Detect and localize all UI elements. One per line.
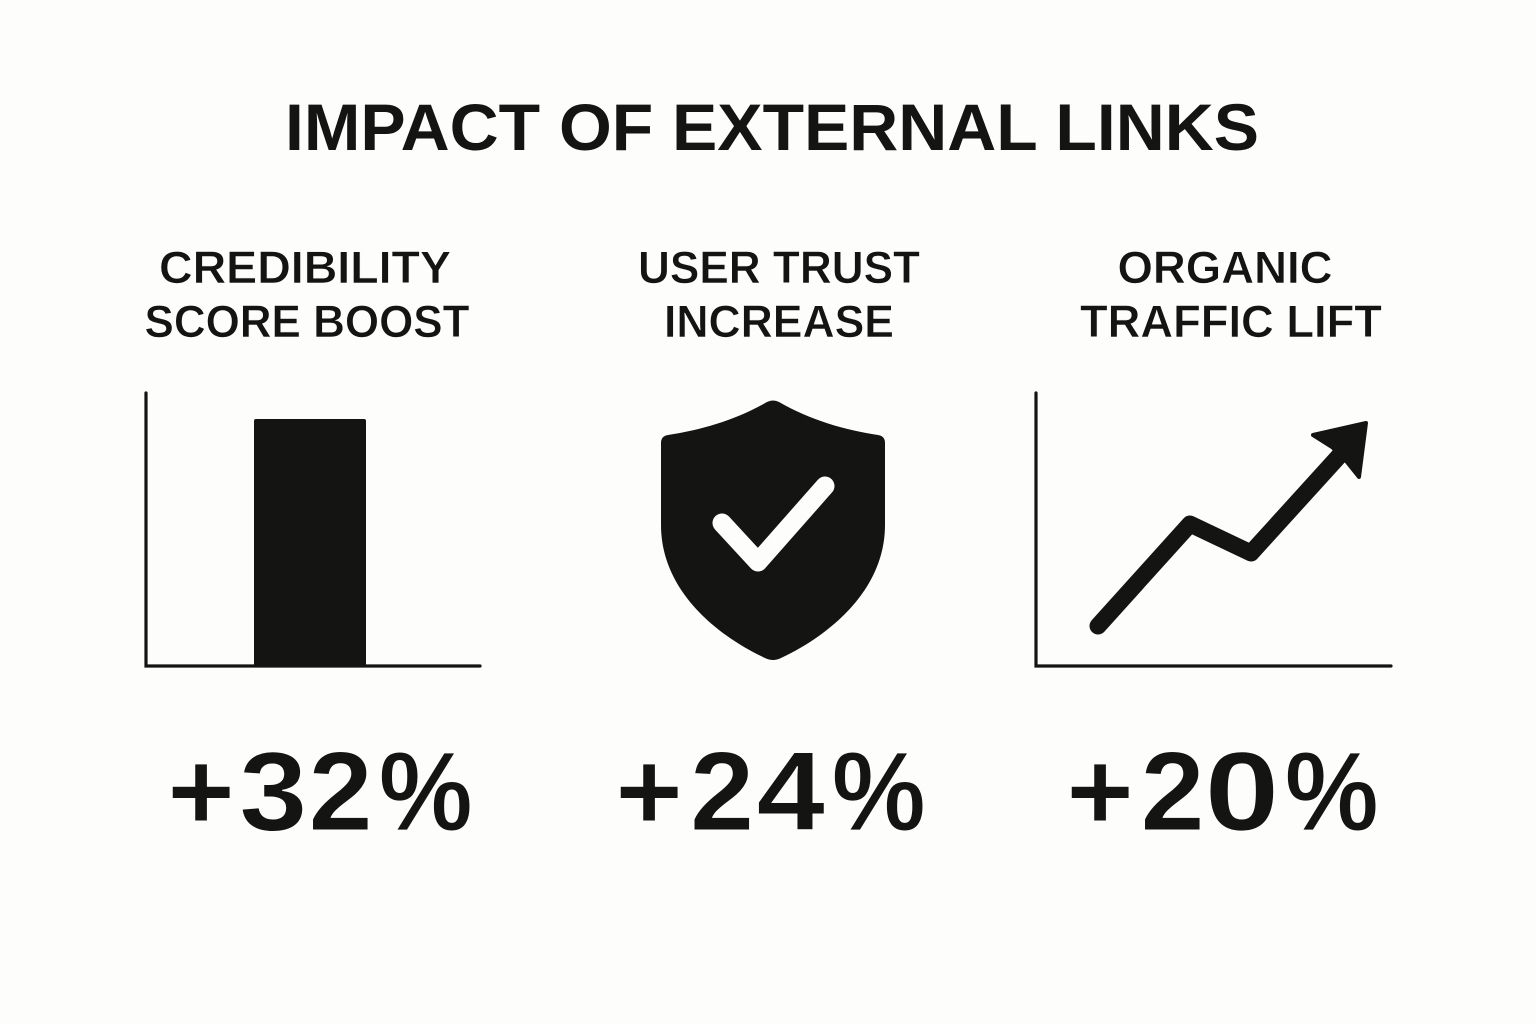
value: +32%: 3: [239, 729, 307, 854]
title: IMPACT OF EXTERNAL LINKS: [285, 90, 1259, 164]
value: +20%: +: [1066, 729, 1134, 854]
value: +24%: 4: [756, 729, 825, 854]
heading: organic traffic: TRAFFIC LIFT: [1080, 296, 1382, 347]
panel: credibility score boost: [144, 242, 480, 854]
heading: user trust: USER TRUST: [638, 242, 920, 293]
icon: shield with check: [661, 400, 885, 660]
value: +24%: 2: [690, 729, 754, 854]
heading: user trust: INCREASE: [664, 296, 894, 347]
value: +32%: +: [167, 729, 235, 854]
line chart with arrow: [1036, 393, 1391, 666]
value: +32%: 2: [308, 729, 373, 854]
heading: credibility: CREDIBILITY: [159, 242, 451, 293]
heading: organic traffic: ORGANIC: [1118, 242, 1332, 293]
value: +20%: 2: [1140, 729, 1205, 854]
value: +20%: %: [1285, 729, 1379, 854]
value: +24%: [615, 729, 926, 854]
bar chart: [146, 393, 480, 666]
value: +24%: %: [832, 729, 926, 854]
heading: credibility: [144, 242, 470, 347]
value: +32%: %: [379, 729, 473, 854]
value: +20%: 0: [1205, 729, 1279, 854]
panel: organic traffic lift: [1036, 242, 1391, 854]
heading: credibility: SCORE BOOST: [144, 296, 470, 347]
value: +20%: [1066, 729, 1379, 854]
value: +24%: +: [615, 729, 683, 854]
heading: organic traffic: [1080, 242, 1382, 347]
value: +32%: [167, 729, 473, 854]
panel: user trust increase: [615, 242, 926, 854]
heading: user trust: [638, 242, 920, 347]
